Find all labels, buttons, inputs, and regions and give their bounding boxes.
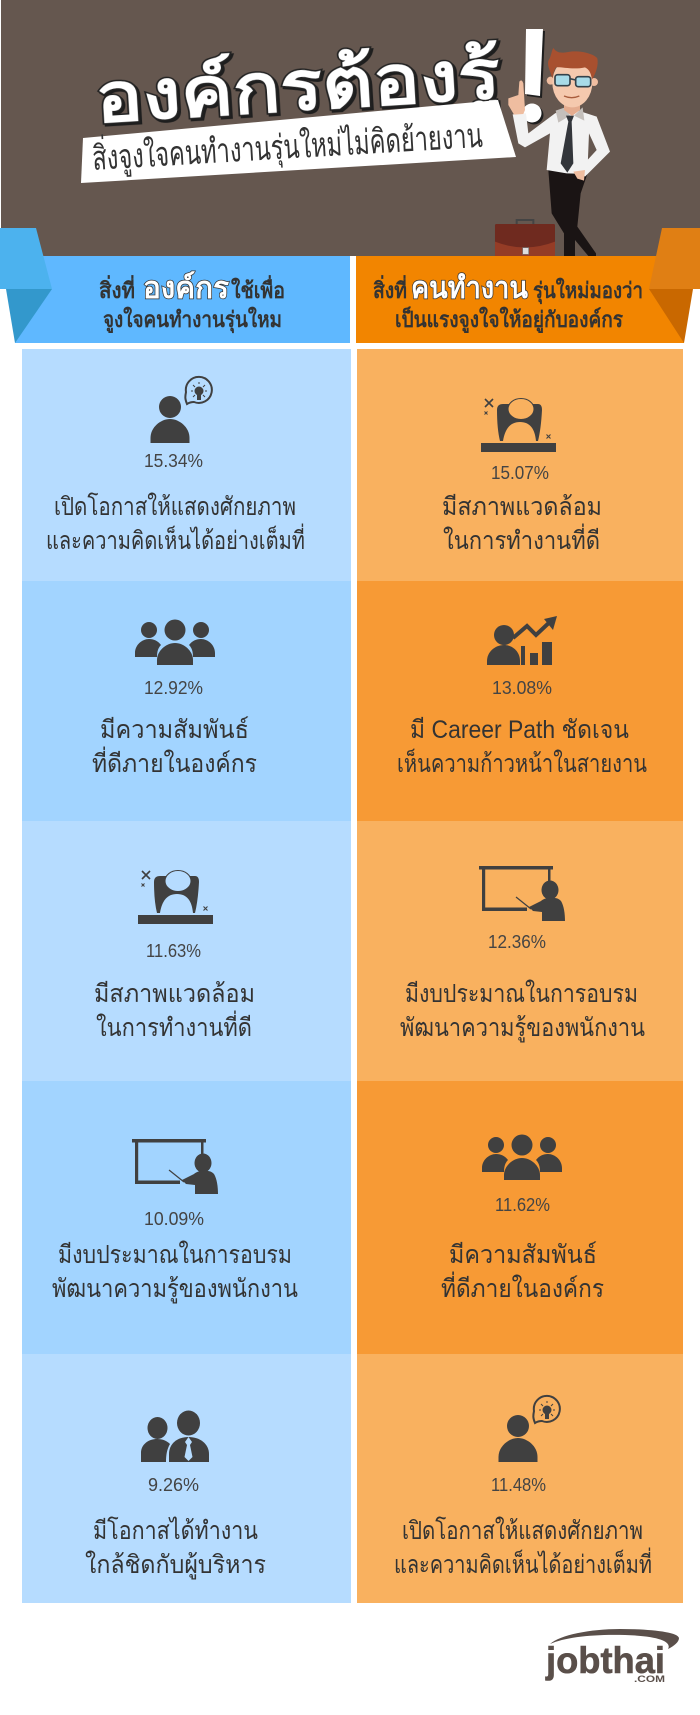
icon: training presenter <box>132 1139 218 1194</box>
percentage: 10.09% <box>144 1209 204 1229</box>
description <box>441 1241 604 1303</box>
icon: briefcase <box>495 220 555 256</box>
description: มีสภาพแวดล้อม <box>442 493 602 521</box>
percentage: 12.36% <box>488 932 546 952</box>
description: และความคิดเห็นได้อย่างเต็มที่ <box>46 523 305 555</box>
description <box>52 1240 298 1304</box>
tie <box>561 116 574 173</box>
header background <box>1 0 700 256</box>
panel: left column heading: สิ่งที่ <box>99 274 135 303</box>
panel: right row 1 <box>357 349 683 581</box>
description: มีโอกาสได้ทำงาน <box>93 1516 258 1545</box>
icon: exclamation mark <box>522 29 543 122</box>
panel: right row 2 <box>357 581 683 821</box>
description <box>442 493 602 555</box>
icon: group of people <box>482 1134 562 1180</box>
description: ในการทำงานที่ดี <box>443 523 600 555</box>
description: ที่ดีภายในองค์กร <box>441 1271 604 1303</box>
ears and face <box>547 77 555 85</box>
ribbon: left <box>0 228 52 343</box>
illustration: man with briefcase <box>495 48 610 256</box>
panel: left row 2 <box>22 581 351 821</box>
logo: jobthai: .COM <box>634 1674 665 1684</box>
percentage: 15.34% <box>144 451 203 471</box>
icon: person with idea bubble <box>150 377 212 443</box>
mouth <box>564 96 579 98</box>
panel: left row 1 <box>22 349 351 581</box>
description: ใกล้ชิดกับผู้บริหาร <box>85 1550 266 1580</box>
title: องค์กรต้องรู้ <box>93 36 503 142</box>
panel: left column heading: จูงใจคนทำงานรุ่นใหม <box>103 306 282 334</box>
subtitle strip: สิ่งจูงใจคนทำงานรุ่นใหม่ไม่คิดย้ายงาน <box>91 112 484 179</box>
description: เปิดโอกาสให้แสดงศักยภาพ <box>402 1516 643 1545</box>
percentage: 11.48% <box>491 1475 546 1495</box>
hair <box>548 48 598 79</box>
description <box>94 980 255 1042</box>
description: มีงบประมาณในการอบรม <box>58 1240 292 1269</box>
icon: workplace environment <box>138 870 213 924</box>
glasses <box>555 75 591 87</box>
neck <box>564 99 580 116</box>
panel: left column heading: ใช้เพื่อ <box>231 274 285 303</box>
icon: workplace environment <box>481 398 556 452</box>
description <box>85 1516 266 1580</box>
panel: right column heading: รุ่นใหม่มองว่า <box>533 277 643 305</box>
panel: right column heading: เป็นแรงจูงใจให้อยู่กับองค์กร <box>395 305 623 334</box>
panel: left column heading: องค์กร <box>143 271 229 305</box>
percentage: 11.63% <box>146 941 201 961</box>
icon: group of people <box>135 620 215 665</box>
description: มีความสัมพันธ์ <box>449 1241 597 1269</box>
description: มีความสัมพันธ์ <box>100 716 249 744</box>
description: มีงบประมาณในการอบรม <box>405 979 638 1008</box>
collar <box>556 107 584 123</box>
pocket hand <box>573 170 585 181</box>
description: พัฒนาความรู้ของพนักงาน <box>400 1014 645 1043</box>
description: ในการทำงานที่ดี <box>96 1010 252 1042</box>
percentage: 13.08% <box>492 678 552 698</box>
panel: left column heading <box>0 228 350 343</box>
logo: jobthai <box>545 1629 679 1684</box>
shirt and arms <box>513 107 610 177</box>
icon: training presenter <box>479 866 565 921</box>
percentage: 15.07% <box>491 463 549 483</box>
icon: person with growth chart <box>487 616 557 665</box>
icon: colleague and executive <box>141 1410 209 1462</box>
ribbon: right <box>649 228 700 343</box>
description: ที่ดีภายในองค์กร <box>92 746 257 778</box>
description: เห็นความก้าวหน้าในสายงาน <box>397 748 647 778</box>
description: พัฒนาความรู้ของพนักงาน <box>52 1275 298 1304</box>
percentage: 11.62% <box>495 1195 550 1215</box>
description <box>397 716 647 778</box>
description: มี Career Path ชัดเจน <box>410 716 629 744</box>
description <box>46 492 305 555</box>
panel: left row 4 <box>22 1081 351 1354</box>
percentage: 12.92% <box>144 678 203 698</box>
description: เปิดโอกาสให้แสดงศักยภาพ <box>54 492 296 521</box>
subtitle strip <box>81 100 516 183</box>
pants <box>548 170 596 256</box>
panel: right column heading <box>356 228 700 343</box>
hand <box>508 80 525 115</box>
description <box>400 979 645 1043</box>
panel: right column heading: สิ่งที่ <box>373 274 407 303</box>
panel: left row 5 <box>22 1354 351 1603</box>
percentage: 9.26% <box>148 1475 199 1495</box>
panel: left row 3 <box>22 821 351 1081</box>
panel: right row 3 <box>357 821 683 1081</box>
description <box>394 1516 652 1579</box>
logo: jobthai: jobthai <box>545 1640 665 1681</box>
panel: right row 5 <box>357 1354 683 1603</box>
panel: right column heading: คนทำงาน <box>411 272 528 305</box>
description: มีสภาพแวดล้อม <box>94 980 255 1008</box>
panel: right row 4 <box>357 1081 683 1354</box>
icon: person with idea bubble <box>498 1396 560 1462</box>
description <box>92 716 257 778</box>
